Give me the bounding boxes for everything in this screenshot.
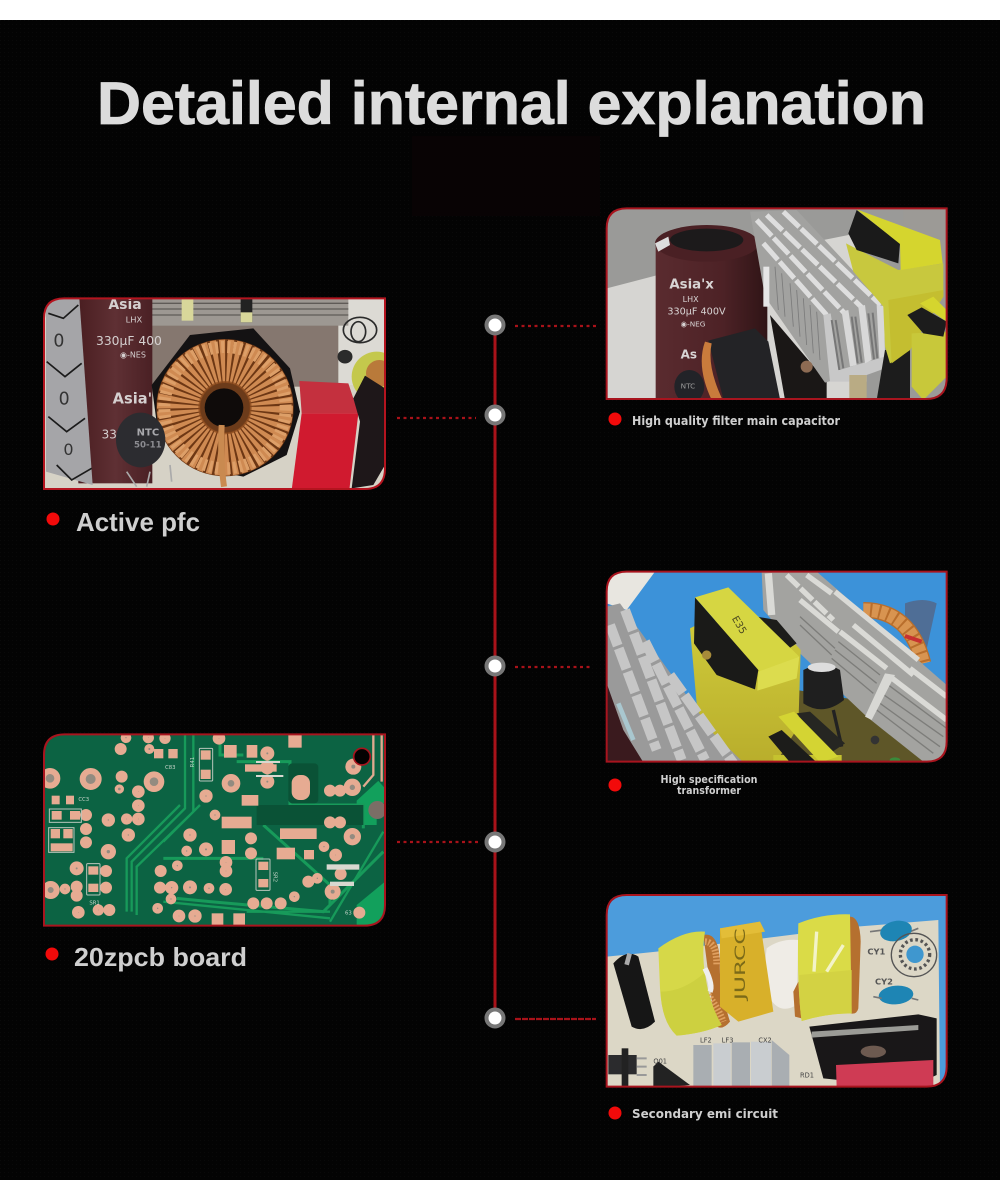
panel: pcb board photo: CC3 (78, 797, 89, 803)
light green copper traces (127, 735, 385, 925)
capacitor: 330µF 400V (667, 307, 726, 318)
white potting (766, 940, 798, 1009)
faint dark square behind title (412, 136, 600, 216)
bullet: transformer (608, 778, 622, 792)
panel: pcb board photo (43, 734, 386, 927)
panel: filter capacitor photo (607, 208, 947, 403)
lower heatsink (693, 1040, 789, 1088)
bullet: active pfc (46, 512, 60, 526)
capacitor with label strip: 33 (102, 427, 117, 441)
right toroid (793, 914, 861, 1021)
NTC thermistor: 50-11 (134, 441, 162, 451)
cream circuit board (607, 920, 940, 1087)
label: transformer: transformer (677, 785, 742, 797)
blue safety capacitors: CY1 (867, 946, 885, 956)
aluminium heatsink (750, 210, 885, 400)
panel: pcb board photo: SR1 (89, 900, 100, 906)
left toroid (658, 932, 730, 1036)
bullet: capacitor (608, 412, 622, 426)
panel: pcb board photo: 63 (345, 910, 352, 916)
capacitor with label strip: ◉-NES (120, 351, 146, 360)
yellow jurcc capacitor: JURCC (733, 928, 749, 1002)
wrapped inductor (674, 328, 780, 403)
panel: emi circuit photo: CX2 (758, 1036, 772, 1044)
capacitor: ◉-NEG (681, 320, 706, 329)
panel: emi circuit photo: RD1 (800, 1072, 814, 1080)
dotted connectors (397, 326, 596, 1019)
panel: active pfc photo (44, 295, 402, 490)
capacitor (655, 225, 767, 400)
right heatsink (762, 572, 947, 762)
silkscreen marks (256, 761, 359, 886)
label: active pfc: Active pfc (76, 507, 200, 537)
yellow transformer (846, 209, 943, 400)
capacitor with label strip (46, 295, 162, 485)
capacitor: Asia'x (669, 277, 714, 292)
yellow transformer: E35 (729, 614, 748, 636)
red capacitor box (292, 381, 358, 490)
coil and small capacitor (863, 600, 937, 663)
panel: emi circuit photo: Q01 (653, 1057, 667, 1065)
small yellow transformer (768, 712, 845, 762)
vertical timeline with nodes (486, 316, 504, 1026)
bullet: emi (608, 1106, 622, 1120)
heatsink wall (150, 298, 348, 387)
capacitor with label strip: 0 (63, 440, 74, 459)
small transformer (907, 297, 947, 400)
dark block (352, 376, 385, 488)
round solder pads (43, 735, 362, 920)
rectangular smd pads (51, 735, 317, 927)
blue safety capacitors (867, 918, 937, 1006)
panel: pcb board photo: R41 (190, 757, 196, 767)
toroid inductor (152, 328, 300, 487)
wrapped inductor: NTC (681, 381, 695, 390)
NTC thermistor: NTC (137, 428, 159, 439)
yellow transformer (690, 587, 801, 762)
label: filter capacitor: High quality filter main capacitor (632, 414, 840, 428)
capacitor: As (681, 347, 697, 361)
board (780, 690, 922, 761)
panel: pcb board photo: SR2 (271, 872, 277, 882)
capacitor with label strip: 330µF 400 (96, 334, 162, 348)
small switch and transistor (608, 1048, 690, 1088)
capacitor: LHX (683, 295, 699, 304)
panel: emi circuit photo: LF3 (722, 1036, 733, 1044)
label: pcb board: 20zpcb board (74, 942, 247, 972)
black capacitor (613, 953, 655, 1029)
capacitor with label strip: LHX (126, 314, 143, 324)
left heatsink (607, 603, 743, 763)
label: transformer: High specification (660, 774, 758, 786)
blue safety capacitors: CY2 (875, 976, 893, 986)
capacitor with label strip: Asia' (113, 390, 152, 407)
capacitor with label strip: 0 (59, 389, 70, 409)
capacitor with label strip: Asia (108, 297, 142, 313)
black rectifier with red part (809, 1014, 937, 1087)
panel: emi circuit photo: LF2 (700, 1036, 712, 1044)
dark parts under heatsink (770, 315, 827, 400)
bullet: pcb (46, 948, 58, 960)
small choke (803, 663, 844, 747)
yellow coil behind (352, 352, 384, 392)
NTC thermistor (116, 413, 172, 487)
title: Detailed internal explanation (97, 70, 926, 137)
capacitor with label strip: 0 (53, 332, 64, 352)
panel: transformer photo (607, 572, 947, 763)
panel: pcb board photo: C83 (165, 765, 176, 771)
black rings (338, 317, 377, 363)
panel: emi circuit photo (607, 895, 947, 1088)
yellow jurcc capacitor (720, 922, 773, 1022)
label: emi circuit: Secondary emi circuit (632, 1106, 778, 1121)
